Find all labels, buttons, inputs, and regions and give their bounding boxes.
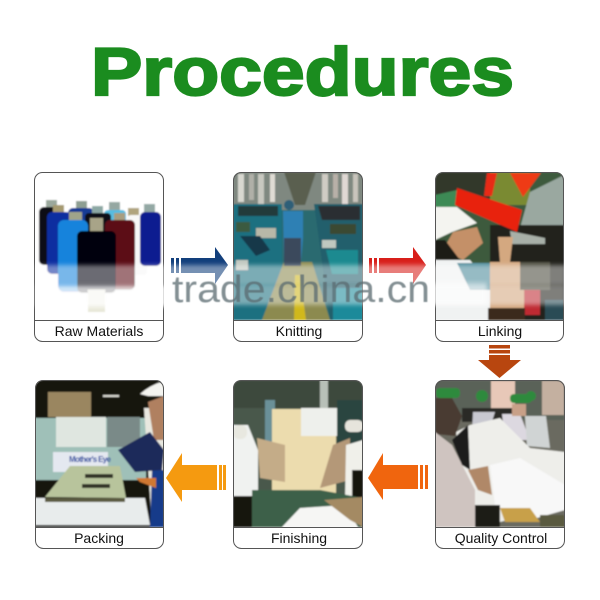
photo: coloured yarn bottles: [38, 199, 162, 312]
label: Raw Materials: [55, 323, 143, 339]
panel: knitting: [233, 172, 363, 342]
photo: knitting machines: [233, 172, 363, 320]
arrow: orange: [166, 453, 226, 502]
label: Finishing: [271, 530, 327, 546]
card frame: [36, 380, 164, 548]
watermark text: trade.china.cn: [172, 269, 430, 311]
card frame: [436, 380, 564, 548]
arrow: blue: [171, 247, 228, 284]
card frame: [234, 380, 362, 548]
card frame: [34, 172, 164, 342]
arrow: red: [369, 247, 426, 284]
title: Procedures: [91, 34, 514, 110]
photo: linking machine with operator: [435, 172, 565, 320]
watermark band: [36, 265, 566, 311]
label: Quality Control: [455, 530, 547, 546]
panel: finishing: [233, 380, 363, 548]
arrow: dark orange: [368, 453, 428, 500]
label: Knitting: [276, 323, 322, 339]
panel: packing: [35, 380, 164, 548]
panel: raw materials: [34, 172, 164, 342]
card frame: [234, 172, 362, 342]
card frame: [436, 172, 564, 342]
panel: linking: [435, 172, 565, 342]
photo: packing conveyor machine: Mother's Eye: [69, 455, 112, 464]
label: Packing: [74, 530, 124, 546]
photo: packing conveyor machine: [35, 380, 164, 527]
label: Linking: [478, 323, 522, 339]
photo: workers inspecting white garments: [435, 380, 565, 527]
panel: quality control: [435, 380, 565, 548]
arrow: down brown: [478, 345, 521, 378]
photo: finishing machine: [233, 380, 363, 527]
